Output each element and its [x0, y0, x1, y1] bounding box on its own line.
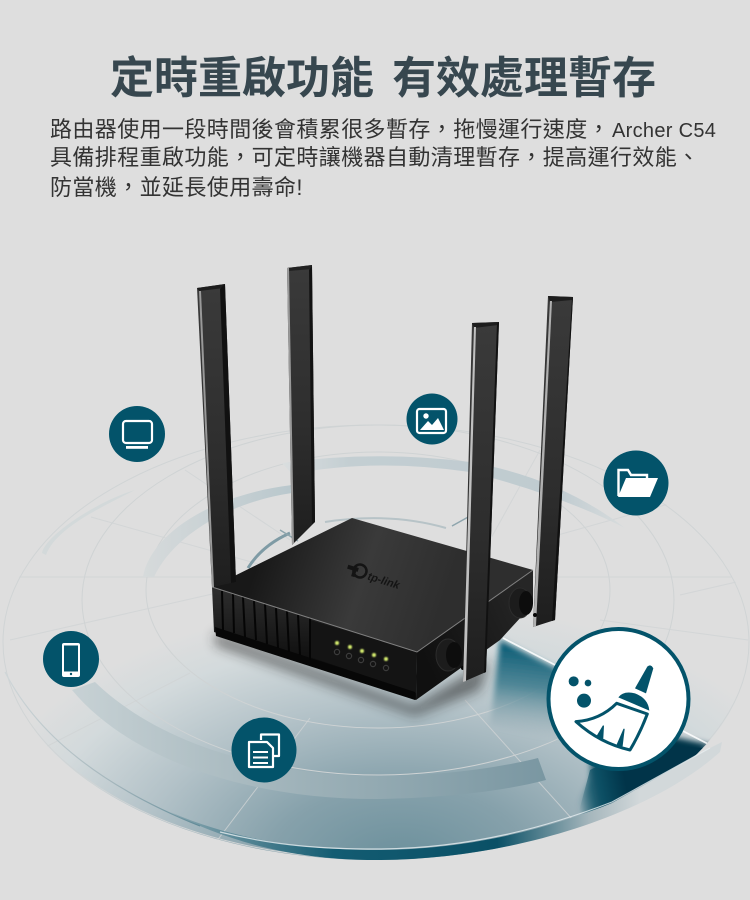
title: 定時重啟功能 有效處理暫存	[110, 42, 656, 106]
disc rim: left edge	[5, 672, 200, 826]
antenna: front left	[197, 284, 236, 587]
router logo	[345, 561, 403, 592]
signal band: lower	[72, 682, 546, 799]
body text	[50, 117, 716, 200]
router display panel	[310, 620, 417, 693]
router ribs	[222, 591, 310, 660]
illustration	[2, 265, 750, 860]
signal arc: inner top	[325, 518, 446, 528]
antenna: back right	[533, 296, 573, 627]
antenna: back left	[287, 265, 315, 545]
signal arc: inner dark	[248, 533, 290, 568]
concentric floor disc	[0, 424, 750, 860]
status LEDs	[334, 641, 389, 671]
router	[197, 265, 573, 716]
disc rim	[170, 742, 722, 860]
body text: 具備排程重啟功能，可定時讓機器自動清理暫存，提高運行效能、	[50, 145, 700, 170]
icon: monitor	[109, 406, 165, 462]
router top	[212, 518, 533, 652]
icon: image	[406, 394, 458, 444]
antenna hinge: front	[436, 639, 465, 671]
signal arc: upper	[282, 456, 625, 528]
router right side	[416, 570, 533, 700]
icon: broom cleaning badge	[548, 629, 688, 769]
icon: folder	[604, 450, 668, 516]
icon: documents	[232, 718, 296, 782]
antenna hinge: rear	[509, 588, 537, 618]
signal arc: far left	[42, 490, 135, 555]
router base lip	[215, 627, 415, 700]
signal arc: middle	[143, 485, 292, 577]
router front panel	[212, 587, 417, 700]
router logo: tp-link	[366, 571, 402, 592]
antenna: front right	[463, 322, 499, 682]
icon: phone	[43, 631, 99, 687]
body text: 防當機，並延長使用壽命!	[50, 175, 303, 200]
router shadow	[215, 632, 490, 716]
dark wedge	[490, 638, 712, 830]
body text: 路由器使用一段時間後會積累很多暫存，拖慢運行速度，Archer C54	[50, 117, 716, 142]
